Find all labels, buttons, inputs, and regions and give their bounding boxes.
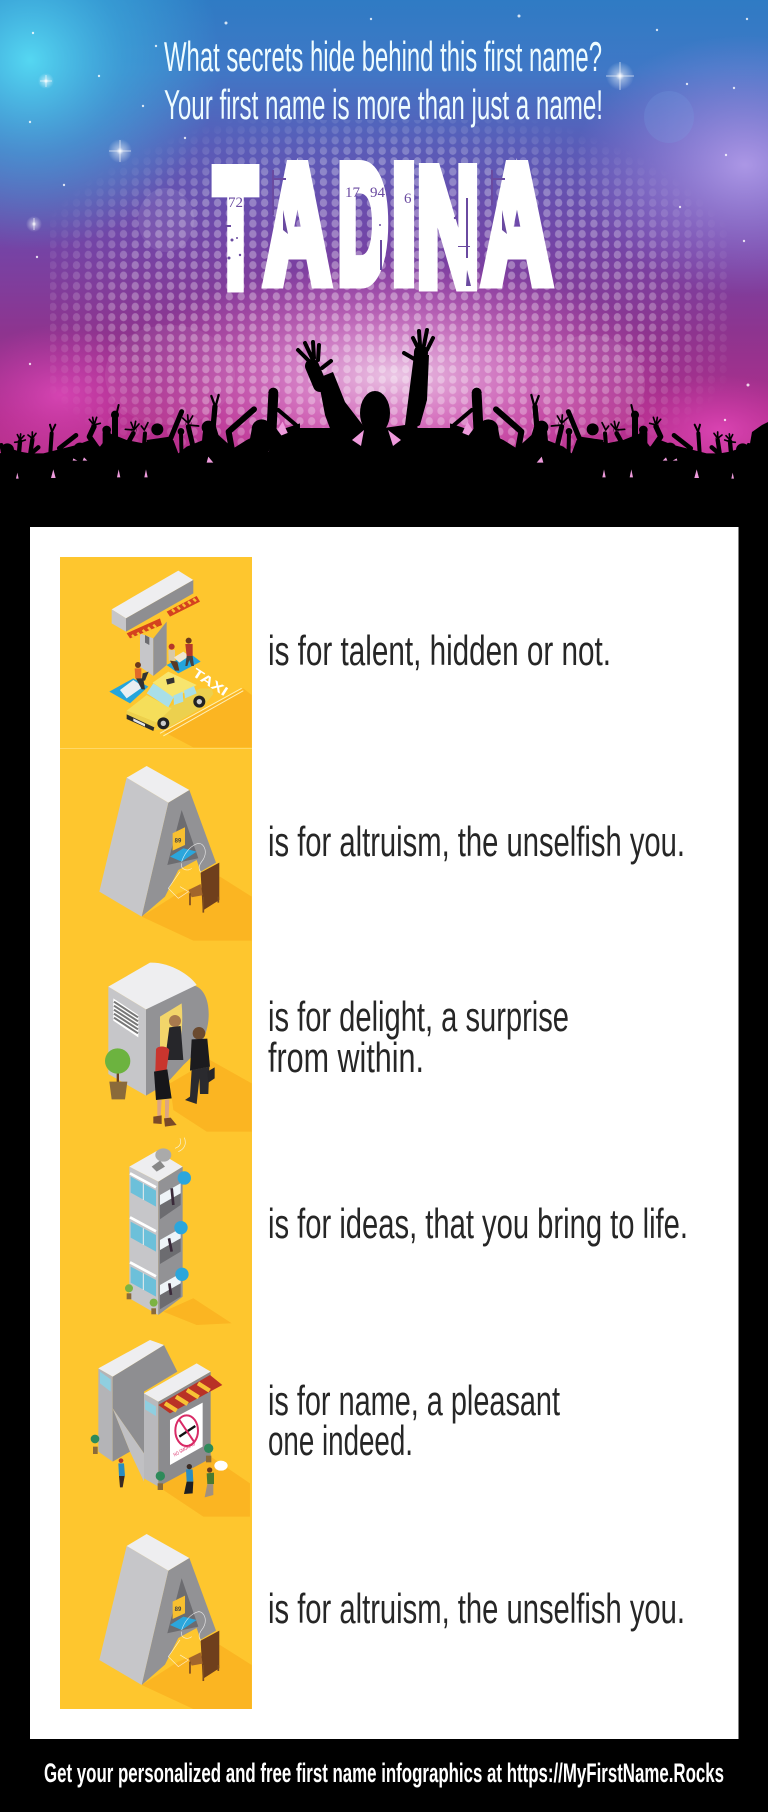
title: TADINA: D (338, 132, 388, 316)
heading: tagline (164, 33, 603, 128)
icon: letter D delight (105, 963, 252, 1132)
icon: letter A altruism repeat (99, 1534, 252, 1709)
text: T line: is for talent, hidden or not. (268, 627, 611, 674)
person: man in doorway (165, 1015, 183, 1060)
text: N lines: one indeed. (268, 1417, 413, 1464)
title: TADINA: A (483, 132, 551, 316)
text: D lines: from within. (268, 1034, 424, 1081)
title: TADINA: A (265, 132, 330, 316)
crowd: right side figures (mirror) (450, 388, 750, 493)
title: TADINA: 6 (404, 191, 412, 207)
title: TADINA: N (417, 135, 479, 319)
icon: letter N no smoking shop (91, 1340, 250, 1517)
crowd silhouette (0, 330, 768, 527)
text: N lines (268, 1377, 560, 1464)
title: TADINA (214, 132, 551, 320)
person: at table (168, 644, 189, 671)
icon: letter A altruism: 89 (175, 839, 182, 845)
person: man with briefcase (185, 1027, 215, 1104)
panel: white content card (30, 527, 738, 1739)
icons: shop plants (91, 1435, 213, 1490)
icons: chat bubbles (174, 1171, 191, 1281)
title: TADINA: 94 (370, 185, 386, 201)
icon: no smoking sign (170, 1403, 203, 1465)
text: D lines (268, 993, 569, 1081)
icon: letter A altruism repeat: 89 (175, 1607, 182, 1613)
crowd: central raised figure (265, 330, 490, 495)
crowd: left side figures (0, 388, 300, 493)
icon: letter A altruism (99, 766, 252, 941)
text: D lines: is for delight, a surprise (268, 993, 569, 1040)
title: TADINA: 72 (228, 195, 243, 211)
text: N lines: is for name, a pleasant (268, 1377, 560, 1424)
icon: chair (189, 863, 219, 913)
person: standing (185, 638, 194, 666)
panel: yellow illustration column (60, 557, 252, 1709)
icon: satellite dish (152, 1138, 185, 1172)
title: TADINA: I (392, 132, 416, 316)
title: TADINA: T (214, 136, 257, 320)
title: TADINA: 17 (345, 185, 360, 201)
icons: small plants (125, 1284, 158, 1314)
crowd: right edge (748, 422, 768, 490)
label: TAXI road marking: TAXI (189, 666, 230, 699)
icon: no smoking sign: NO SMOKING (173, 1441, 197, 1458)
people: pedestrians (118, 1458, 228, 1497)
icon: letter I office tower (125, 1138, 232, 1325)
person: woman in red (153, 1046, 177, 1127)
decorative stars (26, 14, 750, 421)
lower black stage band (0, 486, 768, 527)
person: seated (135, 662, 149, 689)
icon: potted tree (105, 1048, 130, 1099)
panel: concert header background (0, 0, 768, 490)
icon: chair (189, 1631, 219, 1681)
icon: taxi car (127, 672, 213, 731)
icon: letter T taxi stand (109, 571, 252, 747)
